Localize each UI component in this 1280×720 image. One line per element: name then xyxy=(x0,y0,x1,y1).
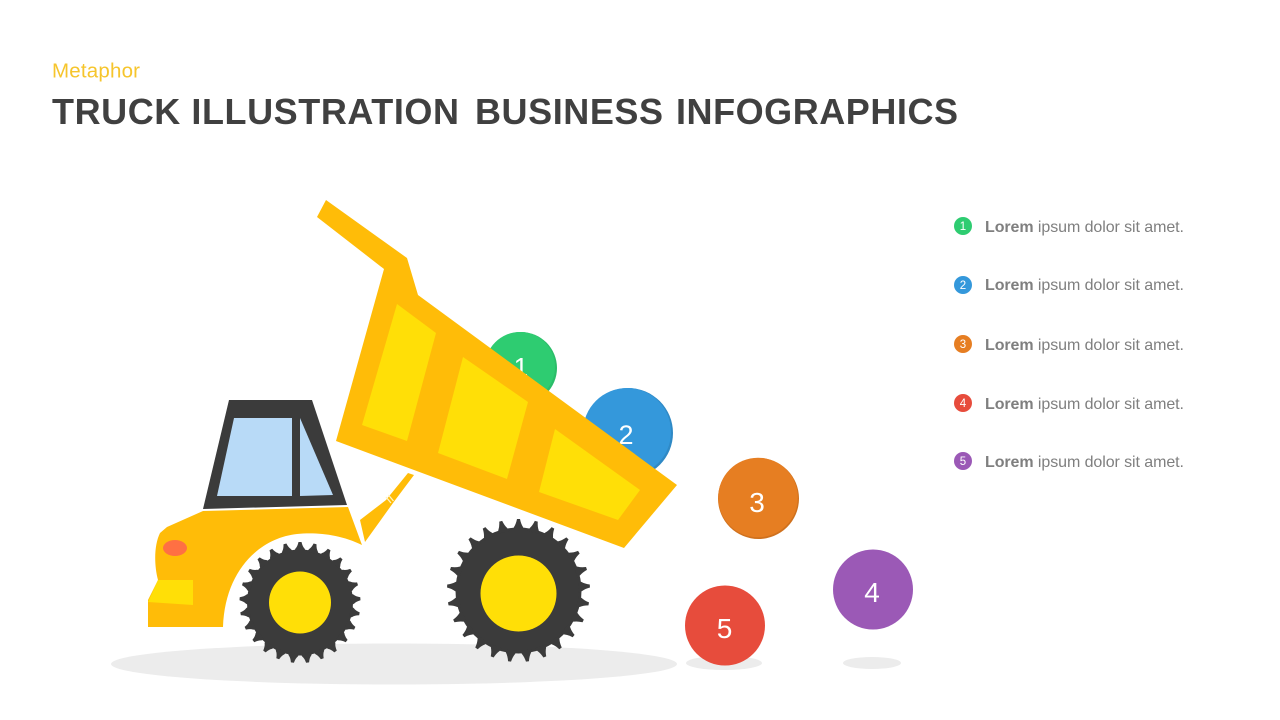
truck xyxy=(148,200,677,663)
ball 3 xyxy=(718,458,799,539)
ball 4 xyxy=(833,550,913,630)
title: INFOGRAPHICS xyxy=(676,91,958,132)
legend item 2: Lorem ipsum dolor sit amet. xyxy=(985,277,1184,294)
ball 5 xyxy=(685,586,765,666)
ball 1: 1 xyxy=(514,352,528,382)
title: TRUCK ILLUSTRATION xyxy=(52,91,459,132)
legend xyxy=(954,217,1184,471)
legend item 5: Lorem ipsum dolor sit amet. xyxy=(985,454,1184,471)
legend item 4: Lorem ipsum dolor sit amet. xyxy=(985,396,1184,413)
legend item 5: 5 xyxy=(960,456,966,468)
ball 4: 4 xyxy=(864,577,880,608)
legend item 3: Lorem ipsum dolor sit amet. xyxy=(985,337,1184,354)
legend item 3: 3 xyxy=(960,339,966,351)
ball 3: 3 xyxy=(749,487,765,518)
cab window right xyxy=(300,418,333,496)
legend item 4: 4 xyxy=(960,398,967,410)
eyebrow: Metaphor: Metaphor xyxy=(52,60,140,82)
cab body xyxy=(148,507,362,627)
hydraulic piston xyxy=(360,473,414,542)
ball 5: 5 xyxy=(717,613,732,644)
ball 1 xyxy=(485,332,557,404)
tipper bed xyxy=(317,200,677,548)
cab window left xyxy=(217,418,292,496)
ground shadows xyxy=(111,644,901,684)
rear wheel xyxy=(447,519,590,662)
bumper light xyxy=(148,580,193,605)
legend item 1: Lorem ipsum dolor sit amet. xyxy=(985,219,1184,236)
legend item 1: 1 xyxy=(960,221,966,233)
legend item 2: 2 xyxy=(960,280,966,292)
cab frame xyxy=(203,400,347,509)
title: BUSINESS xyxy=(475,91,663,132)
ball 2 xyxy=(583,388,673,478)
front wheel xyxy=(239,542,361,663)
headlight xyxy=(163,540,187,556)
ball 2: 2 xyxy=(618,420,634,450)
